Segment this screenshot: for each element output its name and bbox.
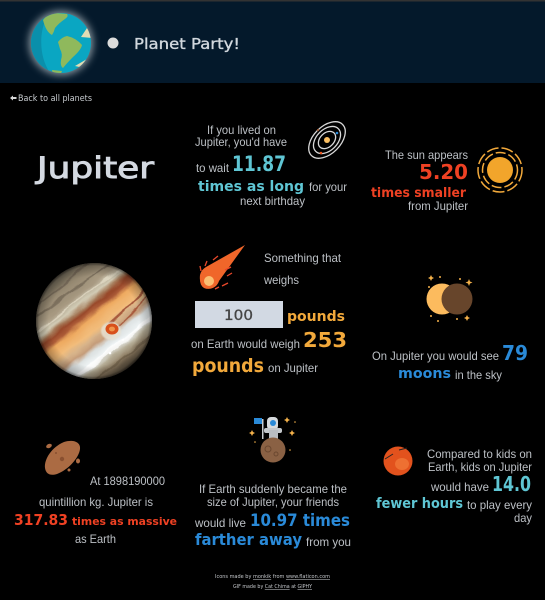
moons text: moons	[398, 366, 451, 382]
icon: astronaut on planet	[249, 417, 296, 462]
icon: eclipse	[426, 275, 472, 322]
icon: asteroid	[45, 441, 80, 475]
day length text: to play every	[467, 498, 532, 512]
panel: sun size	[371, 148, 522, 213]
site title: Planet Party!	[134, 35, 240, 53]
day length text: 14.0	[492, 472, 531, 496]
panel: weight	[191, 245, 347, 377]
distance text	[194, 482, 351, 549]
credits: Icons made by monkik from www.flaticon.com	[215, 574, 330, 580]
weight result text: pounds	[192, 355, 264, 377]
sun text	[371, 148, 468, 213]
image: Jupiter planet	[36, 263, 152, 379]
birthday text: Jupiter, you'd have	[195, 135, 287, 149]
day length text: Compared to kids on	[427, 447, 532, 461]
panel: distance	[194, 417, 351, 549]
panel: moons	[372, 275, 528, 382]
credits: GIF made by Cat Chima at GIPHY	[233, 584, 313, 590]
moons text: 79	[502, 341, 528, 365]
distance text: would live	[194, 516, 246, 530]
moons text: in the sky	[455, 368, 502, 382]
panel: day length	[376, 446, 532, 525]
panel: mass	[14, 441, 177, 546]
distance text: If Earth suddenly became the	[199, 482, 347, 496]
day length text: would have	[430, 480, 489, 494]
birthday text: next birthday	[240, 194, 305, 208]
panel: weight: weighs	[263, 273, 299, 287]
day length text: fewer hours	[376, 496, 463, 512]
input: pounds	[195, 301, 283, 328]
sun text: from Jupiter	[408, 199, 468, 213]
mass text: At 1898190000	[90, 474, 165, 488]
icon: earth	[29, 11, 93, 76]
weight result text: on Earth would weigh	[191, 337, 300, 351]
mass text	[14, 474, 177, 546]
mass text: times as massive	[72, 515, 177, 528]
icon: orbit	[302, 115, 352, 165]
weight result text: pounds	[287, 309, 345, 325]
icon: menu dot	[108, 38, 118, 48]
weight result text: 253	[303, 328, 347, 352]
birthday text: times as long	[198, 179, 304, 195]
icon: spinning planet	[384, 446, 412, 476]
moons text: On Jupiter you would see	[372, 349, 499, 363]
birthday text: for your	[309, 180, 347, 194]
day length text: Earth, kids on Jupiter	[428, 460, 532, 474]
weight result text: on Jupiter	[268, 361, 318, 375]
mass text: 317.83	[14, 511, 68, 529]
mass text: as Earth	[75, 532, 116, 546]
header bar	[0, 0, 545, 83]
panel: birthday	[195, 115, 352, 208]
day length text	[376, 447, 532, 525]
back link: Back to all planets	[18, 94, 93, 104]
distance text: farther away	[195, 530, 303, 549]
sun text: 5.20	[419, 160, 468, 184]
birthday text: 11.87	[232, 152, 286, 176]
day length text: day	[514, 511, 532, 525]
mass text: quintillion kg. Jupiter is	[39, 495, 153, 509]
sun text: times smaller	[371, 186, 467, 201]
birthday text: If you lived on	[207, 123, 276, 137]
input: pounds: 100	[224, 308, 253, 324]
distance text: from you	[306, 535, 351, 549]
distance text: 10.97 times	[250, 511, 350, 531]
heading: Jupiter: Jupiter	[35, 151, 154, 185]
credits	[215, 574, 330, 590]
weight text: Something that	[264, 251, 342, 265]
icon: comet	[200, 245, 245, 289]
weight result text	[191, 309, 347, 377]
birthday text	[195, 123, 347, 208]
moons text	[372, 341, 528, 382]
birthday text: to wait	[196, 161, 230, 175]
icon: sun	[478, 148, 522, 192]
sun text: The sun appears	[385, 148, 468, 162]
distance text: size of Jupiter, your friends	[207, 495, 339, 509]
